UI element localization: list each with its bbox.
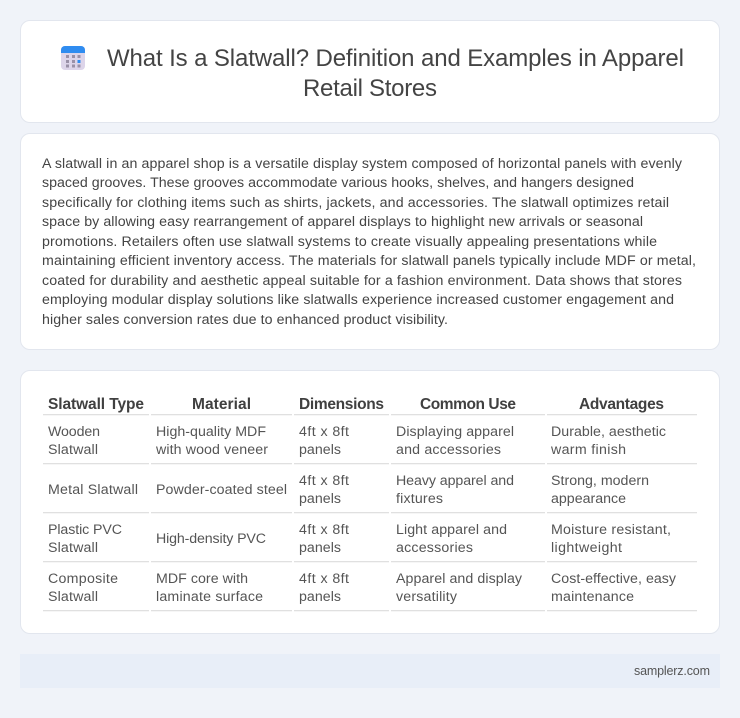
row: wooden slatwall: warm finish — [550, 442, 626, 458]
row: wooden slatwall: 4ft x 8ft — [299, 424, 349, 440]
row: composite slatwall: Apparel and display — [396, 571, 523, 587]
description text: A slatwall in an apparel shop is a versatile display system composed of horizontal panels with evenly — [42, 156, 683, 172]
row: metal slatwall: Metal Slatwall — [48, 482, 138, 498]
row: wooden slatwall: Displaying apparel — [396, 424, 514, 440]
table header — [48, 396, 664, 413]
description text — [42, 156, 696, 328]
row: composite slatwall: maintenance — [551, 589, 634, 605]
description text: promotions. Retailers often use slatwall systems to create visually appealing presentations while — [42, 234, 657, 250]
row: plastic pvc slatwall: 4ft x 8ft — [299, 522, 349, 538]
table header: Slatwall Type — [48, 396, 144, 413]
title — [107, 45, 684, 102]
row: plastic pvc slatwall: High-density PVC — [156, 531, 266, 547]
description text: higher sales conversion rates due to enhanced product visibility. — [42, 312, 448, 328]
table header: Material — [192, 396, 251, 413]
footer text: samplerz.com — [634, 664, 710, 678]
row: metal slatwall: 4ft x 8ft — [299, 473, 349, 489]
row: wooden slatwall — [48, 424, 666, 458]
row: plastic pvc slatwall: panels — [299, 540, 341, 556]
table header: Advantages — [579, 396, 664, 413]
row: metal slatwall: Powder-coated steel — [156, 482, 287, 498]
row: plastic pvc slatwall: accessories — [396, 540, 473, 556]
row: metal slatwall: Heavy apparel and — [396, 473, 514, 489]
panel: description — [20, 133, 720, 350]
row: wooden slatwall: with wood veneer — [155, 442, 268, 458]
description text: space by allowing easy rearrangement of apparel displays to highlight new arrivals or seasonal — [42, 214, 643, 230]
icon: calendar grid — [61, 46, 85, 70]
row: wooden slatwall: Slatwall — [48, 442, 98, 458]
row: plastic pvc slatwall: Plastic PVC — [48, 522, 122, 538]
row: wooden slatwall: Wooden — [48, 424, 100, 440]
row: metal slatwall: Strong, modern — [551, 473, 649, 489]
description text: specifically for clothing items such as shirts, jackets, and accessories. The slatwall optimizes retail — [42, 195, 669, 211]
description text: maintaining efficient inventory access. The materials for slatwall panels typically include MDF or metal, — [42, 253, 696, 269]
row: metal slatwall: appearance — [551, 491, 626, 507]
row: composite slatwall: laminate surface — [156, 589, 263, 605]
row: wooden slatwall: Durable, aesthetic — [551, 424, 666, 440]
row: wooden slatwall: panels — [299, 442, 341, 458]
row: metal slatwall: fixtures — [396, 491, 443, 507]
table rules — [43, 414, 697, 611]
row: composite slatwall — [48, 571, 677, 605]
title card — [20, 20, 720, 123]
footer bar — [20, 654, 720, 688]
row: wooden slatwall: and accessories — [396, 442, 501, 458]
row: composite slatwall: Composite — [48, 571, 118, 587]
panel: table card — [20, 370, 720, 634]
description text: coated for durability and aesthetic appeal suitable for a fashion environment. Data shows that stores — [42, 273, 682, 289]
row: wooden slatwall: High-quality MDF — [156, 424, 266, 440]
title: What Is a Slatwall? Definition and Examples in Apparel — [107, 45, 684, 72]
row: plastic pvc slatwall: Light apparel and — [396, 522, 507, 538]
row: plastic pvc slatwall: Moisture resistant, — [551, 522, 671, 538]
row: plastic pvc slatwall: lightweight — [551, 540, 622, 556]
row: metal slatwall — [48, 473, 649, 507]
row: composite slatwall: panels — [299, 589, 341, 605]
row: composite slatwall: MDF core with — [156, 571, 248, 587]
title: Retail Stores — [303, 75, 437, 102]
row: plastic pvc slatwall: Slatwall — [48, 540, 98, 556]
row: plastic pvc slatwall — [48, 522, 671, 556]
description text: spaced grooves. These grooves accommodate various hooks, shelves, and hangers designed — [42, 175, 634, 191]
row: composite slatwall: Slatwall — [48, 589, 98, 605]
description text: employing modular display solutions like slatwalls experience increased customer engagement and — [42, 292, 674, 308]
row: composite slatwall: Cost-effective, easy — [551, 571, 677, 587]
row: composite slatwall: 4ft x 8ft — [299, 571, 349, 587]
table header: Dimensions — [299, 396, 384, 413]
row: composite slatwall: versatility — [396, 589, 458, 605]
table header: Common Use — [420, 396, 516, 413]
row: metal slatwall: panels — [299, 491, 341, 507]
